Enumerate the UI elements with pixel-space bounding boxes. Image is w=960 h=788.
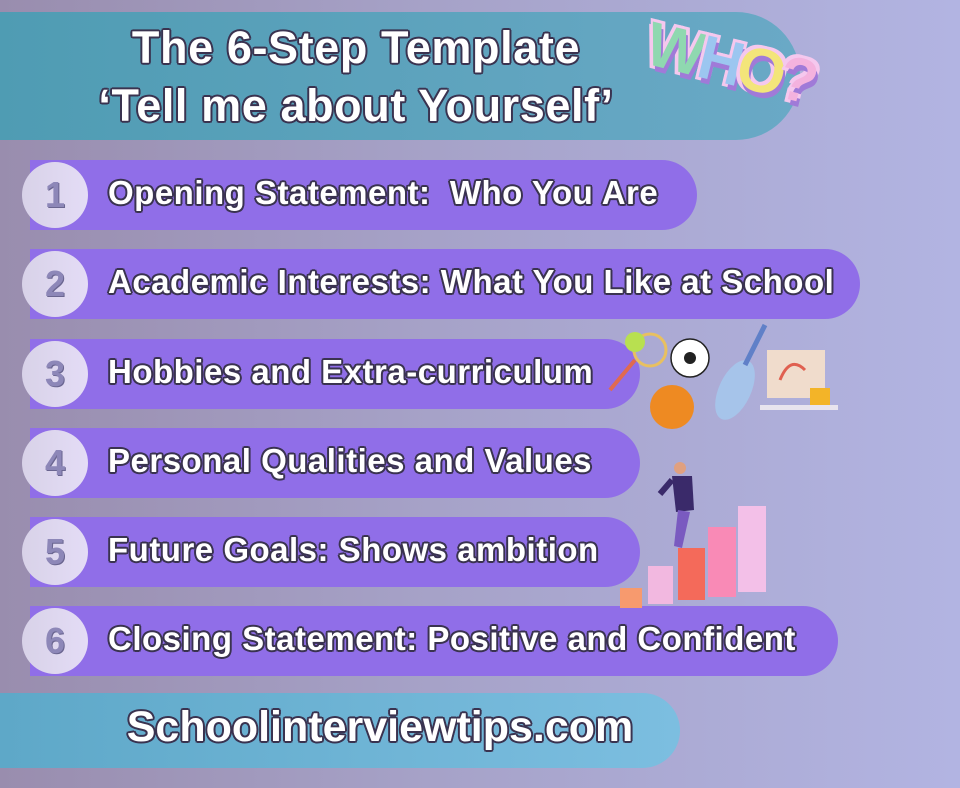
- step 1: [30, 160, 697, 230]
- step 5: Future Goals: Shows ambition: [108, 531, 599, 568]
- step 6: [30, 606, 838, 676]
- step 3: [30, 339, 640, 409]
- step 2: [30, 249, 860, 319]
- step 2: 2: [45, 263, 65, 304]
- step 6: Closing Statement: Positive and Confident: [108, 620, 796, 657]
- step 5: [30, 517, 640, 587]
- footer banner: [0, 693, 680, 768]
- icon: climbing person: [660, 462, 694, 548]
- header banner: [0, 12, 800, 140]
- step 3: Hobbies and Extra-curriculum: [108, 353, 593, 390]
- title: ‘Tell me about Yourself’: [98, 80, 614, 131]
- step 4: [30, 428, 640, 498]
- step 1: Opening Statement: Who You Are: [108, 174, 658, 211]
- step 4: 4: [45, 442, 65, 483]
- title: The 6-Step Template: [132, 22, 580, 73]
- icon: WHO?: WHO?: [639, 10, 820, 117]
- step 1: 1: [45, 174, 65, 215]
- footer text: Schoolinterviewtips.com: [127, 703, 633, 751]
- step 2: Academic Interests: What You Like at School: [108, 263, 834, 300]
- step 3: 3: [45, 353, 65, 394]
- step 6: 6: [45, 620, 65, 661]
- title: [98, 22, 614, 131]
- step 4: Personal Qualities and Values: [108, 442, 592, 479]
- bar chart: growth: [620, 462, 766, 608]
- step 5: 5: [45, 531, 65, 572]
- icon: hobbies illustration: [608, 324, 838, 429]
